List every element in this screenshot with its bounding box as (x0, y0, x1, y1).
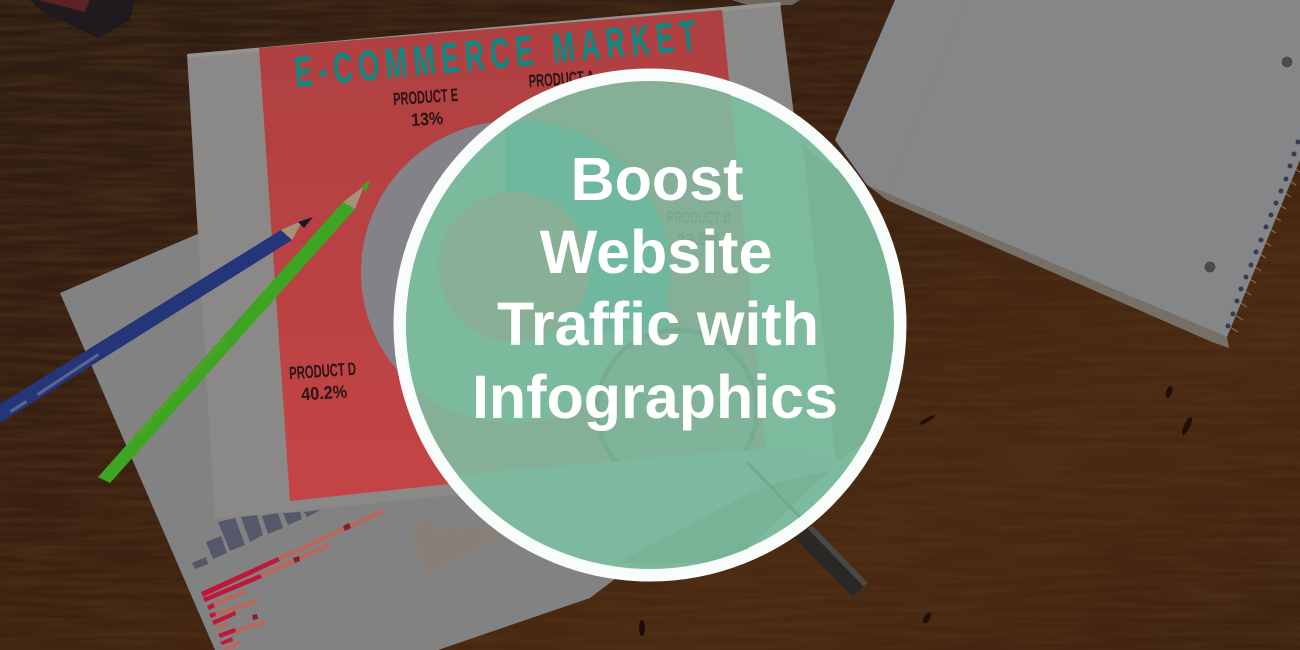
pencil: blue (0, 217, 313, 423)
wood knots and scratches (639, 385, 1194, 636)
notebook cover page (835, 0, 1300, 337)
magnifying glass handle (795, 525, 868, 597)
notebook spiral wires (1230, 167, 1300, 332)
poster title: E-COMMERCE MARKET (292, 11, 698, 97)
column chart (192, 510, 320, 569)
label: product D: PRODUCT D (288, 359, 357, 383)
notebook margin line (888, 0, 967, 190)
label: product E (392, 85, 460, 131)
ghost label: product B: 23.5% (677, 230, 721, 249)
main paper sheet (187, 2, 836, 519)
dark object at top left (30, 0, 135, 38)
notebook spiral binding (1226, 140, 1300, 328)
label: product D (288, 359, 358, 405)
headline: Website (540, 218, 772, 286)
spiral notebook (835, 0, 1300, 348)
notebook punch holes (1204, 56, 1293, 273)
notebook page edge (867, 185, 1229, 348)
back paper with charts (60, 233, 640, 650)
title badge (394, 68, 906, 582)
blue pencil lettering (10, 353, 99, 413)
headline: Infographics (472, 363, 838, 431)
pencil: green (98, 180, 370, 483)
headline (472, 145, 838, 431)
ghost label: product B (668, 212, 730, 245)
horizontal bar chart (201, 509, 383, 650)
headline: Traffic with (497, 290, 819, 358)
label: product A: PRODUCT A (528, 67, 595, 91)
badge white ring (400, 75, 900, 575)
label: product D: 40.2% (300, 381, 348, 405)
donut chart (361, 121, 663, 423)
label: product E: PRODUCT E (392, 85, 459, 109)
badge see-through photo details (406, 81, 894, 569)
red poster panel (259, 10, 766, 501)
ghost label: product B: PRODUCT B (667, 208, 731, 227)
step area chart (413, 518, 500, 575)
green pencil lettering (140, 337, 226, 433)
headline: Boost (571, 145, 743, 213)
object at top edge (732, 0, 800, 6)
label: product E: 13% (410, 108, 444, 130)
